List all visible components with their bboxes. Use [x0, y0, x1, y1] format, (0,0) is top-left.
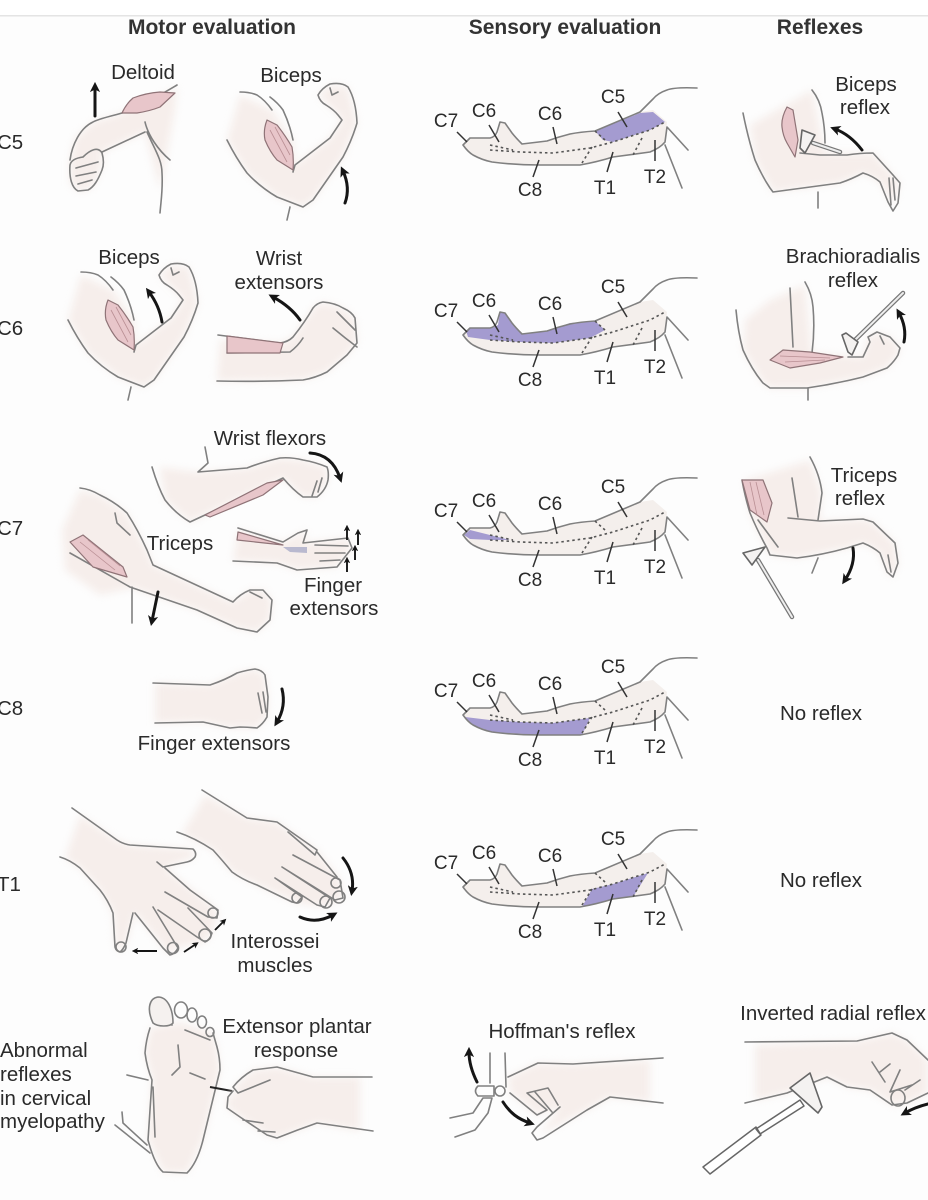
reflex hammer [800, 130, 840, 153]
label triceps reflex: reflex [835, 487, 886, 510]
sensory map: C7: C6 [472, 491, 496, 512]
sensory map: T1: C6 [538, 846, 562, 867]
panel: C7 wrist flexors [152, 427, 340, 522]
reflex hammer [842, 293, 903, 355]
label biceps reflex: Biceps [835, 73, 897, 96]
label extensor plantar response: Extensor plantar [222, 1015, 372, 1038]
sensory map: C7: T2 [644, 557, 666, 578]
muscle [770, 350, 843, 368]
level label abnormal reflexes: myelopathy [0, 1110, 106, 1133]
extensor muscle [237, 532, 283, 545]
sensory map: C5: C7 [434, 111, 458, 132]
sensory map: C6: T2 [644, 357, 666, 378]
arrow down [845, 548, 854, 580]
sensory map: C7: C6 [538, 494, 562, 515]
arrow up [469, 1052, 477, 1082]
level label abnormal reflexes: Abnormal [0, 1039, 88, 1062]
label wrist extensors: extensors [235, 271, 323, 294]
panel: C7 triceps [62, 488, 272, 632]
sensory map: C5 [434, 87, 697, 201]
reflex hammer [703, 1073, 822, 1174]
label biceps: Biceps [98, 246, 160, 269]
reflex hammer [743, 547, 792, 617]
arrow curved [273, 297, 300, 320]
arrow diagonal lower [184, 944, 196, 952]
column heading: motor evaluation: Motor evaluation [128, 16, 296, 39]
arrow left [135, 950, 157, 952]
arrow left [905, 1104, 928, 1113]
sensory map: C5: C8 [518, 180, 542, 201]
arrow up [94, 87, 96, 116]
sensory map: T1: T2 [644, 909, 666, 930]
label interossei muscles: muscles [237, 954, 313, 977]
label finger extensors: extensors [290, 597, 378, 620]
sensory map: C8: C6 [538, 674, 562, 695]
panel: C7 finger extensors [233, 528, 378, 620]
sensory map: T1: C8 [518, 922, 542, 943]
arrow diagonal upper [215, 921, 224, 930]
panel: foot with plantar response [115, 997, 373, 1173]
arrow up [149, 292, 162, 322]
panel: C6 wrist extensors [217, 247, 357, 381]
label inverted radial reflex: Inverted radial reflex [740, 1002, 927, 1025]
muscle [742, 480, 772, 522]
label brachioradialis reflex: Brachioradialis [786, 245, 920, 268]
sensory map: C6: T1 [594, 368, 616, 389]
label triceps: Triceps [147, 532, 213, 555]
sensory map: C6: C6 [472, 291, 496, 312]
panel: Hoffman's reflex [450, 1020, 663, 1140]
wrist flexor muscle [205, 480, 283, 517]
pin [210, 1087, 232, 1091]
panel: brachioradialis reflex [736, 245, 920, 400]
column heading: sensory evaluation: Sensory evaluation [469, 16, 661, 39]
label finger extensors: Finger [304, 574, 362, 597]
note: no reflex at T1: No reflex [780, 869, 863, 892]
label wrist flexors: Wrist flexors [214, 427, 326, 450]
panel: T1 right hand [177, 790, 353, 977]
label wrist extensors: Wrist [256, 247, 302, 270]
sensory map: C5: C6 [538, 104, 562, 125]
sensory map: C5: T1 [594, 178, 616, 199]
sensory map: C5: T2 [644, 167, 666, 188]
sensory map: C5: C5 [601, 87, 625, 108]
examiner hand [227, 1067, 360, 1138]
arrow curved down [277, 689, 283, 722]
label deltoid: Deltoid [111, 61, 175, 84]
sensory map: C7 [434, 477, 697, 591]
wrist extensor muscle [227, 336, 283, 353]
column heading: reflexes: Reflexes [777, 16, 863, 39]
label interossei muscles: Interossei [231, 930, 319, 953]
label brachioradialis reflex [786, 245, 920, 292]
panel: C5 biceps [227, 64, 357, 220]
sensory map: C7: C7 [434, 501, 458, 522]
sensory map: C6: C7 [434, 301, 458, 322]
fingernails [292, 878, 345, 908]
label interossei muscles [231, 930, 319, 977]
panel: biceps reflex [743, 73, 900, 211]
sensory map: C8: C7 [434, 681, 458, 702]
level label abnormal reflexes [0, 1039, 106, 1133]
label Hoffman's reflex: Hoffman's reflex [488, 1020, 636, 1043]
sensory map: C8: T1 [594, 748, 616, 769]
toes [149, 997, 214, 1036]
sensory map: C6: C6 [538, 294, 562, 315]
sensory map: C6 [434, 277, 697, 391]
label extensor plantar response: response [254, 1039, 338, 1062]
sensory map: C7: T1 [594, 568, 616, 589]
label finger extensors [290, 574, 378, 620]
arrow down [503, 1102, 530, 1123]
arrow curved up [343, 171, 347, 203]
sensory map: C6: C5 [601, 277, 625, 298]
sensory map: C5: C6 [472, 101, 496, 122]
tendon patch [283, 547, 307, 553]
label biceps reflex: reflex [840, 96, 891, 119]
label brachioradialis reflex: reflex [828, 269, 879, 292]
note: no reflex at C8: No reflex [780, 702, 863, 725]
sensory map: C7: C8 [518, 570, 542, 591]
panel: T1 left hand [60, 808, 224, 955]
panel: inverted radial reflex [703, 1002, 928, 1174]
sensory map: C7: C5 [601, 477, 625, 498]
panel: C6 biceps [68, 246, 198, 400]
sensory map: T1: C7 [434, 853, 458, 874]
arrow up [899, 313, 905, 342]
level label abnormal reflexes: in cervical [0, 1087, 91, 1110]
sensory map: C8: T2 [644, 737, 666, 758]
sensory map: C8: C6 [472, 671, 496, 692]
label extensor plantar response [222, 1015, 372, 1062]
sensory map: T1: C6 [472, 843, 496, 864]
label wrist extensors [235, 247, 323, 294]
fingernails [116, 908, 218, 954]
panel: triceps reflex [742, 457, 898, 617]
triceps muscle [70, 535, 127, 577]
sensory map: T1 [434, 829, 697, 943]
deltoid muscle [122, 92, 175, 113]
sensory map: C8: C8 [518, 750, 542, 771]
label triceps reflex: Triceps [831, 464, 897, 487]
arrow curved [300, 915, 333, 920]
sensory map: T1: C5 [601, 829, 625, 850]
panel: C8 finger extensors [138, 669, 290, 755]
sensory map: C6: C8 [518, 370, 542, 391]
small arrows [347, 528, 358, 572]
arrow curved [343, 858, 353, 891]
sensory map: C8 [434, 657, 697, 771]
arrow curved [310, 453, 340, 478]
muscle [782, 107, 798, 157]
label biceps: Biceps [260, 64, 322, 87]
arrow down [152, 592, 158, 621]
label biceps reflex [835, 73, 897, 119]
label finger extensors: Finger extensors [138, 732, 290, 755]
arrow curved [835, 129, 862, 150]
sensory map: C8: C5 [601, 657, 625, 678]
top band [0, 0, 928, 16]
sensory map: T1: T1 [594, 920, 616, 941]
label triceps reflex [831, 464, 897, 510]
level label abnormal reflexes: reflexes [0, 1063, 72, 1086]
panel: C5 deltoid [70, 61, 177, 213]
